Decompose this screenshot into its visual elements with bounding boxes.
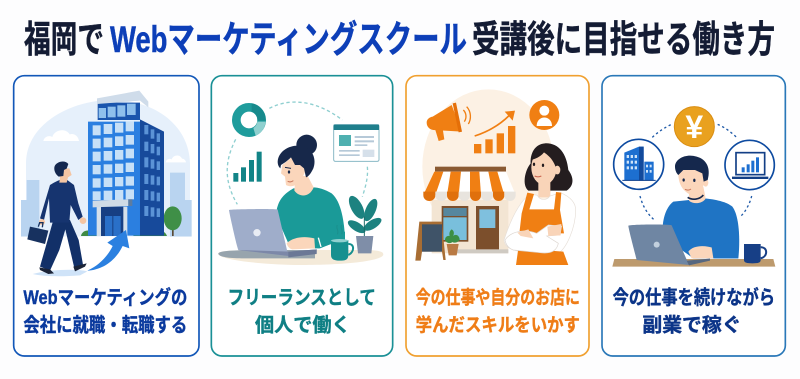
title: 福岡で [24, 19, 104, 60]
panel: side job [602, 76, 785, 356]
caption [228, 288, 376, 337]
illustration: freelancer woman at laptop [218, 102, 383, 265]
caption [613, 286, 775, 337]
caption [416, 287, 580, 336]
caption [23, 286, 187, 337]
caption: 副業で稼ぐ [642, 315, 742, 337]
illustration: man walking to office building [20, 91, 197, 283]
panel: company employment [14, 76, 199, 356]
caption: 学んだスキルをいかす [416, 315, 580, 336]
illustration: man working a side job at laptop [612, 107, 775, 267]
caption: フリーランスとして [228, 288, 376, 309]
caption: 個人で働く [255, 315, 351, 337]
panel: use skills in own shop [406, 76, 589, 356]
caption: Webマーケティングの [23, 286, 187, 309]
title: Webマーケティングスクール [110, 19, 467, 60]
illustration: man working a side job at laptop: ¥ [685, 109, 703, 145]
illustration: shop owner with marketing icons [415, 89, 576, 265]
caption: 会社に就職・転職する [23, 315, 187, 337]
panel: freelance [211, 76, 393, 356]
title [24, 19, 775, 60]
caption: 今の仕事や自分のお店に [416, 287, 580, 308]
